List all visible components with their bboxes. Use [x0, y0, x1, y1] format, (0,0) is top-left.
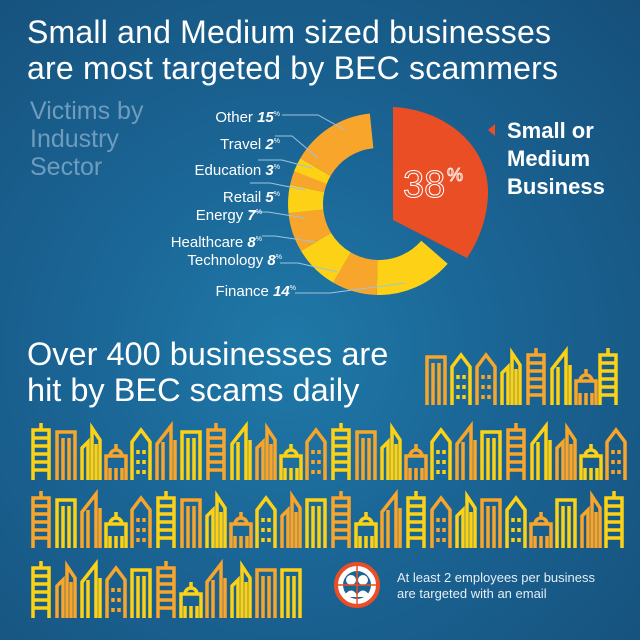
title: [27, 14, 558, 86]
note text: At least 2 employees per business: [397, 570, 595, 585]
callout: small or medium business: Business: [507, 174, 605, 199]
subtitle: victims by industry sector: Sector: [30, 153, 102, 181]
category labels: Travel 2%: [220, 136, 280, 152]
subtitle: victims by industry sector: Victims by: [30, 97, 143, 125]
category labels: [195, 109, 280, 206]
note text: [397, 570, 595, 601]
title: Small and Medium sized businesses: [27, 14, 551, 50]
callout: small or medium business: [488, 118, 605, 199]
heading: over 400 businesses: Over 400 businesses are: [27, 336, 388, 372]
red wedge 38%: 38: [403, 164, 445, 206]
category labels: Education 3%: [195, 162, 280, 179]
subtitle: victims by industry sector: Industry: [30, 125, 119, 153]
leader lines: [250, 115, 405, 293]
category labels: Retail 5%: [223, 188, 280, 206]
callout: small or medium business: Small or: [507, 118, 594, 143]
text: Finance 14%: [216, 283, 296, 300]
text: Technology 8%: [187, 252, 282, 269]
category labels: Other 15%: [215, 109, 280, 126]
title: are most targeted by BEC scammers: [27, 50, 558, 86]
subtitle: victims by industry sector: [30, 97, 144, 181]
callout: small or medium business: Medium: [507, 146, 590, 171]
heading: over 400 businesses: [27, 336, 388, 408]
red wedge 38%: %: [447, 165, 463, 185]
heading: over 400 businesses: hit by BEC scams daily: [27, 372, 359, 408]
red wedge 38%: [393, 107, 488, 258]
note text: are targeted with an email: [397, 586, 547, 601]
icon: targeted employees: [334, 562, 380, 608]
text: Healthcare 8%: [171, 234, 262, 250]
text: Energy 7%: [196, 207, 262, 224]
